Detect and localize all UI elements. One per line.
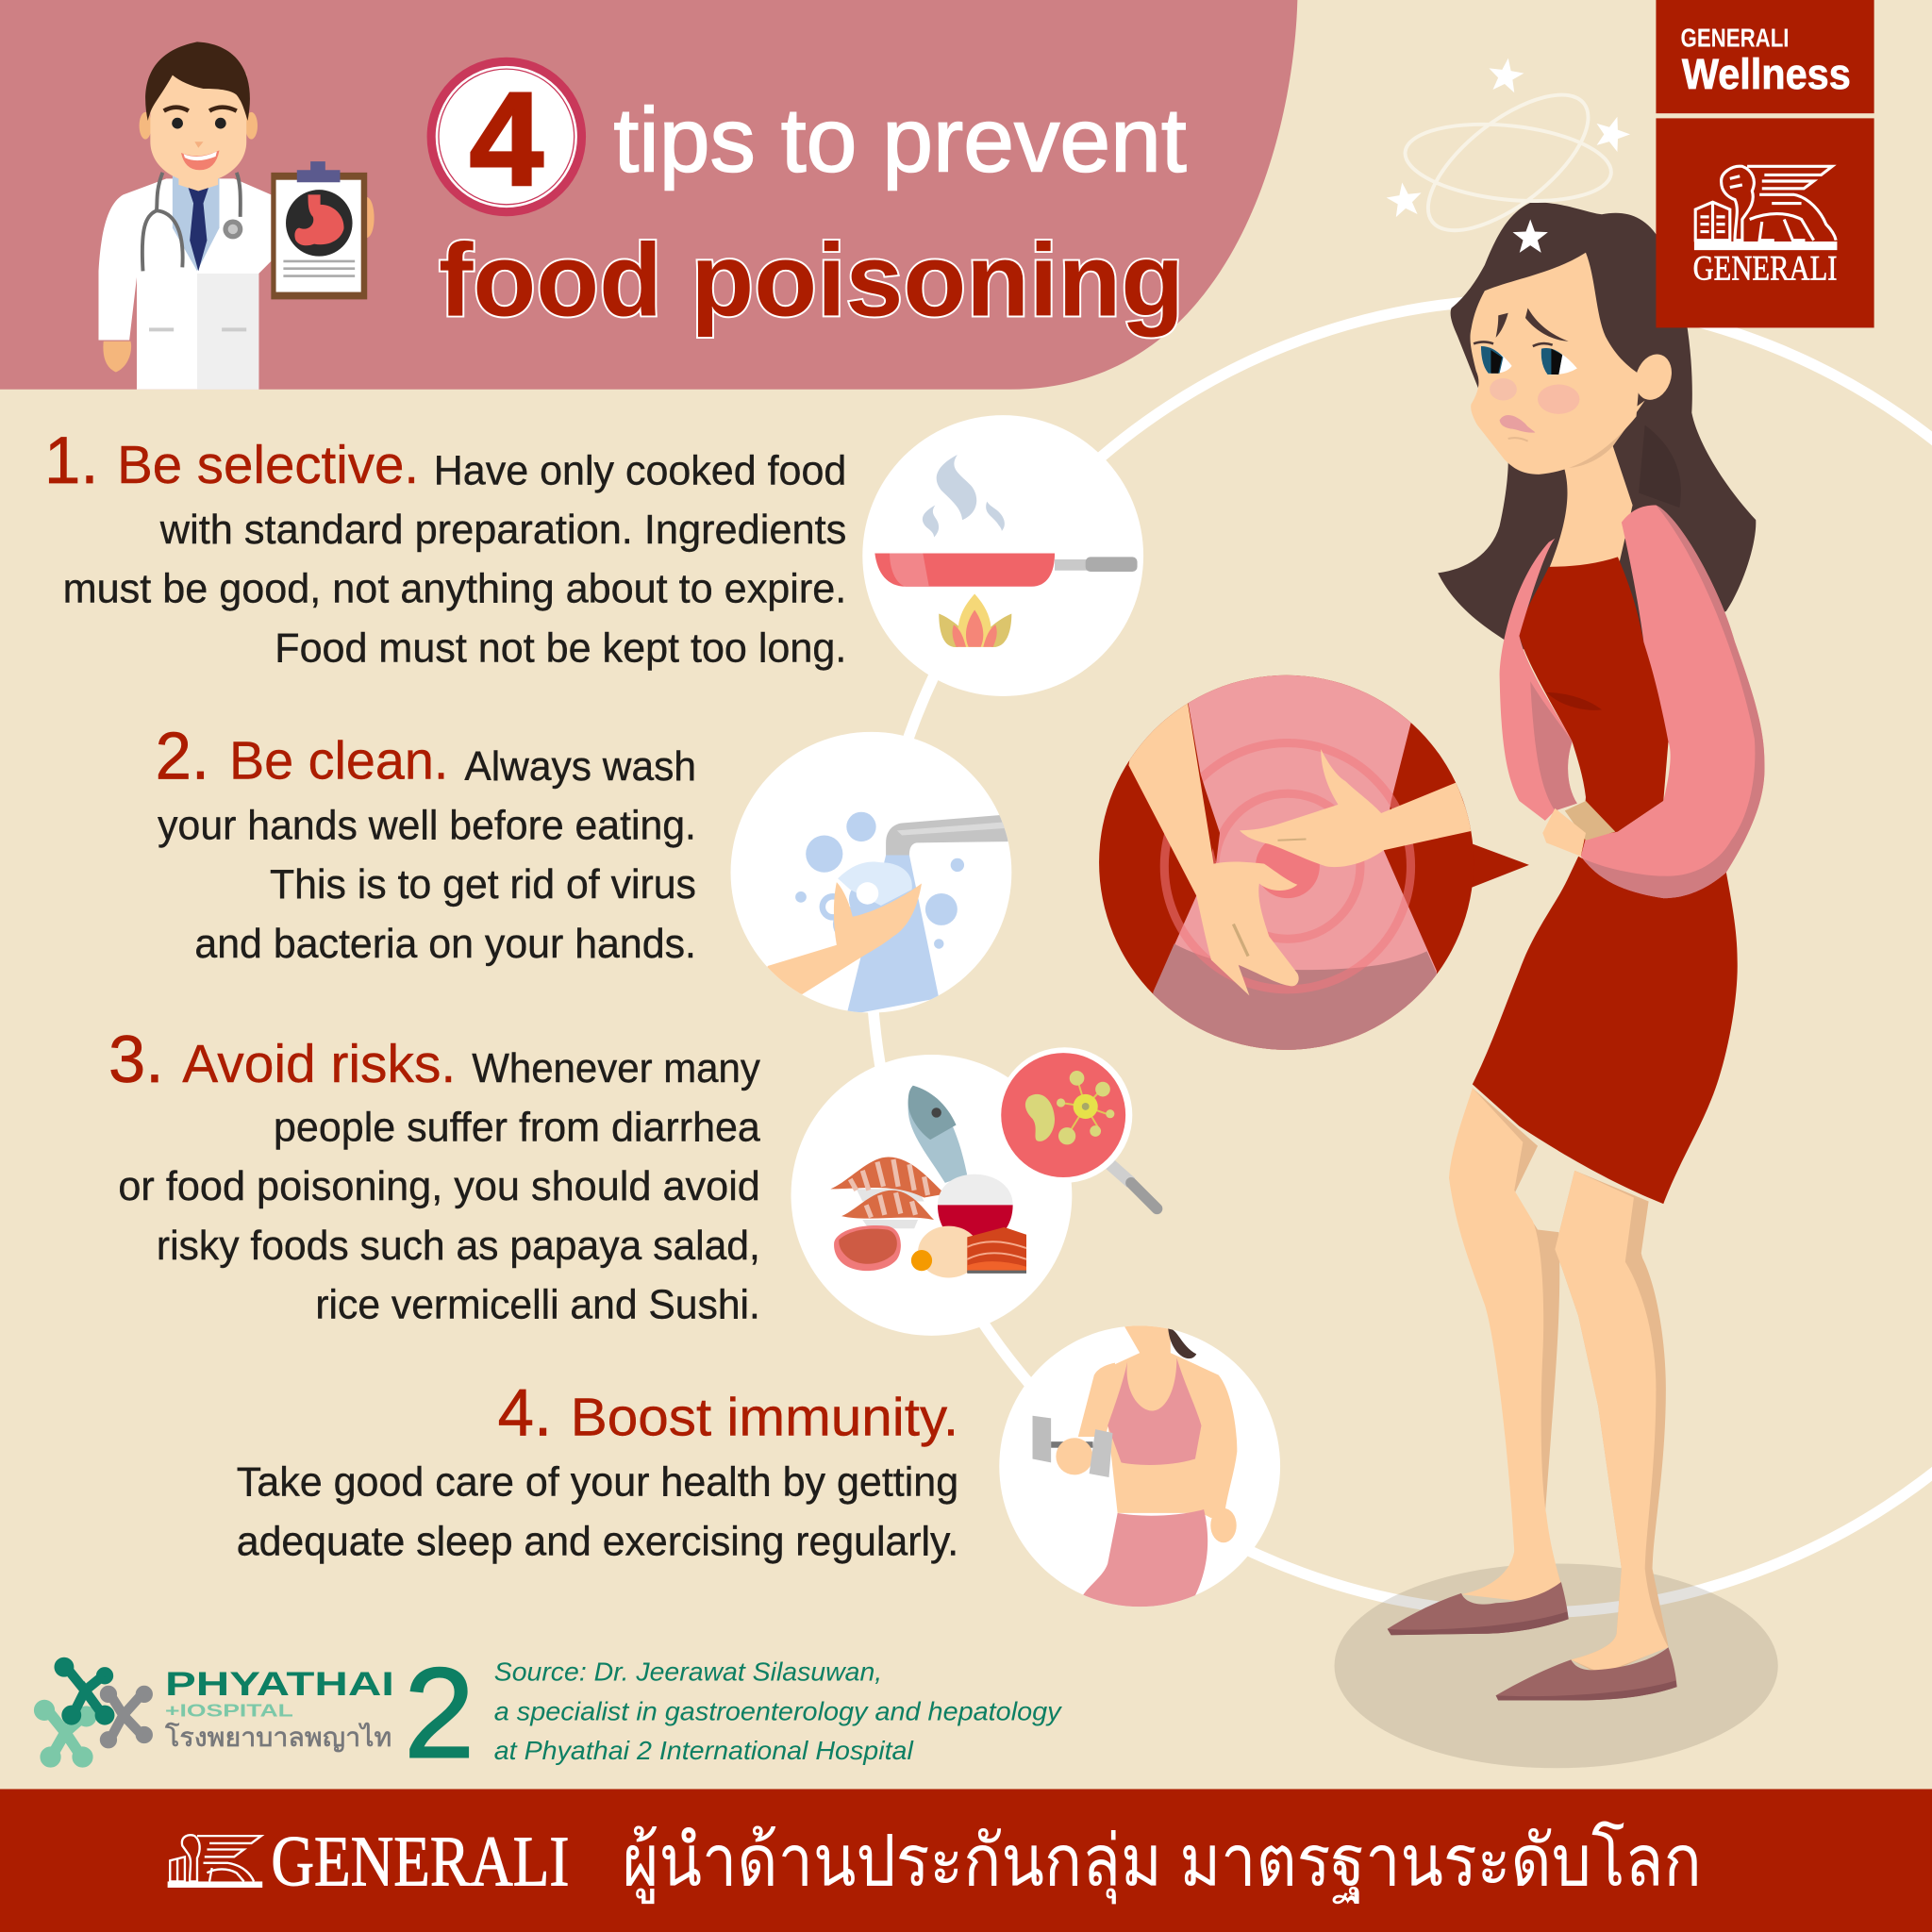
tip 3 text: 3.: [108, 1022, 164, 1096]
tip 3 text: Avoid risks.: [182, 1034, 456, 1093]
source text: a specialist in gastroenterology and hepatology: [494, 1696, 1063, 1725]
Generali logo badge: GENERALI: [1693, 248, 1837, 287]
woman character: [1385, 56, 1765, 1700]
tip 2 text: and bacteria on your hands.: [194, 922, 696, 967]
waist hand: [1542, 801, 1615, 857]
tip 1 text: must be good, not anything about to expire.: [63, 567, 846, 612]
skirt: [1473, 857, 1738, 1204]
rice bowl: [938, 1174, 1013, 1245]
footer lion emblem: [168, 1835, 262, 1888]
hospital logo: โรงพยาบาลพญาไท: [165, 1723, 391, 1752]
hair: [1438, 202, 1756, 665]
doctor illustration: [98, 42, 375, 390]
tip 2 text: 2.: [156, 718, 209, 792]
dizzy orbits: [1401, 71, 1615, 255]
icon: magnifier with germs: [997, 1047, 1157, 1208]
shoes: [1388, 1582, 1677, 1700]
tip 1 text: [44, 423, 846, 671]
sleeves: [1500, 506, 1765, 898]
tip 3 text: rice vermicelli and Sushi.: [315, 1283, 760, 1328]
Generali Wellness badge: [1656, 0, 1874, 113]
steak: [834, 1225, 901, 1271]
tip 2 text: Always wash: [464, 744, 696, 790]
neck: [1549, 400, 1645, 569]
logo mark: [40, 1662, 148, 1762]
icon: frying pan: [862, 415, 1143, 696]
source text: at Phyathai 2 International Hospital: [494, 1736, 914, 1765]
lion emblem: [1694, 166, 1837, 250]
icon: exercising woman: [999, 1321, 1280, 1614]
dress bodice: [1519, 557, 1668, 857]
footer band: [0, 1789, 1932, 1932]
footer wordmark: GENERALI: [271, 1822, 569, 1901]
footer slogan: ผู้นำด้านประกันกลุ่ม มาตรฐานระดับโลก: [623, 1820, 1702, 1904]
number badge: 4: [470, 64, 543, 213]
tip 1 text: with standard preparation. Ingredients: [159, 508, 846, 553]
tip 2 text: This is to get rid of virus: [270, 862, 696, 908]
tip 2 text: [156, 718, 696, 967]
source text: Source: Dr. Jeerawat Silasuwan,: [494, 1657, 882, 1687]
tip 3 text: Whenever many: [472, 1046, 760, 1091]
tip 3 text: people suffer from diarrhea: [274, 1105, 760, 1150]
tip 4 text: 4.: [498, 1375, 552, 1450]
dizzy stars: [1385, 56, 1634, 253]
tip 1 text: Have only cooked food: [434, 448, 846, 493]
left arm: [1078, 1363, 1115, 1437]
sushi: [830, 1157, 945, 1228]
tip 3 text: [108, 1022, 760, 1328]
hospital logo: +IOSPITAL: [165, 1700, 293, 1720]
legs: [1449, 1088, 1668, 1675]
tip 1 text: 1.: [44, 423, 98, 497]
left eye: [1474, 341, 1512, 374]
egg: [911, 1226, 979, 1277]
connecting ring: [871, 299, 1932, 1613]
header band: [0, 0, 1297, 390]
face: [1470, 253, 1677, 475]
Generali logo badge: [1656, 118, 1874, 327]
tip 4 text: adequate sleep and exercising regularly.: [237, 1519, 958, 1564]
salmon block: [967, 1227, 1026, 1274]
tip 2 text: your hands well before eating.: [158, 803, 696, 848]
tip 3 text: risky foods such as papaya salad,: [157, 1224, 760, 1269]
floor shadow: [1335, 1563, 1778, 1768]
belly closeup bubble: [1099, 665, 1529, 1059]
hospital logo: PHYATHAI: [165, 1666, 394, 1703]
tip 4 text: [237, 1375, 958, 1564]
hospital logo: 2: [404, 1641, 475, 1785]
title line 1: tips to prevent: [613, 91, 1187, 192]
icon: risky foods: [791, 1055, 1072, 1336]
title line 2: food poisoning: [439, 223, 1184, 338]
fish: [908, 1086, 967, 1183]
tip 4 text: Take good care of your health by getting: [237, 1460, 958, 1506]
clipboard: [271, 161, 375, 299]
number badge: [431, 61, 581, 213]
tip 3 text: or food poisoning, you should avoid: [118, 1164, 760, 1209]
tip 2 text: Be clean.: [229, 730, 448, 790]
tip 1 text: Food must not be kept too long.: [275, 625, 846, 671]
Generali Wellness badge: Wellness: [1682, 50, 1851, 98]
source text: [494, 1657, 1063, 1765]
hospital logo: [40, 1641, 475, 1785]
tip 4 text: Boost immunity.: [571, 1388, 958, 1447]
torso and right arm: [1108, 1321, 1237, 1518]
tip 1 text: Be selective.: [117, 435, 419, 494]
icon: hand washing: [731, 732, 1011, 1015]
Generali Wellness badge: GENERALI: [1681, 24, 1789, 53]
right eye: [1533, 343, 1577, 375]
